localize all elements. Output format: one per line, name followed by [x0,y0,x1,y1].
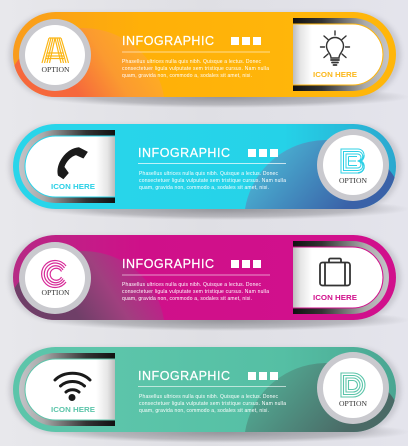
body text: consectetuer ligula vulputate sem tristique cursus. Nam nulla [139,178,286,184]
squares [248,372,278,380]
option circle A [19,19,91,91]
icon panel: briefcase [293,241,389,314]
body text: Phasellus ultrices nulla quis nibh. Quisque a lectus. Donec [122,282,262,288]
label: option: OPTION [42,66,70,74]
icon: wifi [55,373,90,401]
panel: option C [9,235,408,331]
body text: quam, gravida non, commodo a, sodales sit amet, nisi. [122,296,252,302]
option circle B [317,129,389,201]
icon panel: light bulb [293,18,389,91]
body text: quam, gravida non, commodo a, sodales sit amet, nisi. [139,408,269,414]
letter D [341,373,365,397]
letter B [341,149,364,173]
icon: phone [58,148,87,179]
body text: Phasellus ultrices nulla quis nibh. Quisque a lectus. Donec [122,59,262,65]
squares [248,149,278,157]
body text: quam, gravida non, commodo a, sodales sit amet, nisi. [139,185,269,191]
label: icon here: ICON HERE [51,405,95,414]
letter C [42,260,66,288]
heading: INFOGRAPHIC [122,257,214,271]
body text: consectetuer ligula vulputate sem tristique cursus. Nam nulla [122,289,269,295]
icon: light bulb [320,31,350,65]
panel: option D [9,347,408,443]
label: option: OPTION [339,177,367,185]
body text: Phasellus ultrices nulla quis nibh. Quisque a lectus. Donec [139,171,278,177]
panel: option B [9,124,408,220]
label: option: OPTION [42,289,70,297]
body text: consectetuer ligula vulputate sem tristique cursus. Nam nulla [122,66,269,72]
icon panel: phone [19,130,115,203]
label: icon here: ICON HERE [313,293,357,302]
heading: INFOGRAPHIC [122,34,214,48]
heading: INFOGRAPHIC [138,146,230,160]
icon panel: wifi [19,353,115,426]
body text: consectetuer ligula vulputate sem tristique cursus. Nam nulla [139,401,286,407]
body text: quam, gravida non, commodo a, sodales sit amet, nisi. [122,73,252,79]
letter A [42,38,68,63]
squares [231,37,261,45]
heading: INFOGRAPHIC [138,369,230,383]
label: icon here: ICON HERE [51,182,95,191]
label: option: OPTION [339,400,367,408]
panel: option A [9,12,408,108]
squares [231,260,261,268]
body text: Phasellus ultrices nulla quis nibh. Quisque a lectus. Donec [139,394,278,400]
icon: briefcase [320,258,350,286]
label: icon here: ICON HERE [313,70,357,79]
option circle D [317,352,389,424]
option circle C [19,242,91,314]
